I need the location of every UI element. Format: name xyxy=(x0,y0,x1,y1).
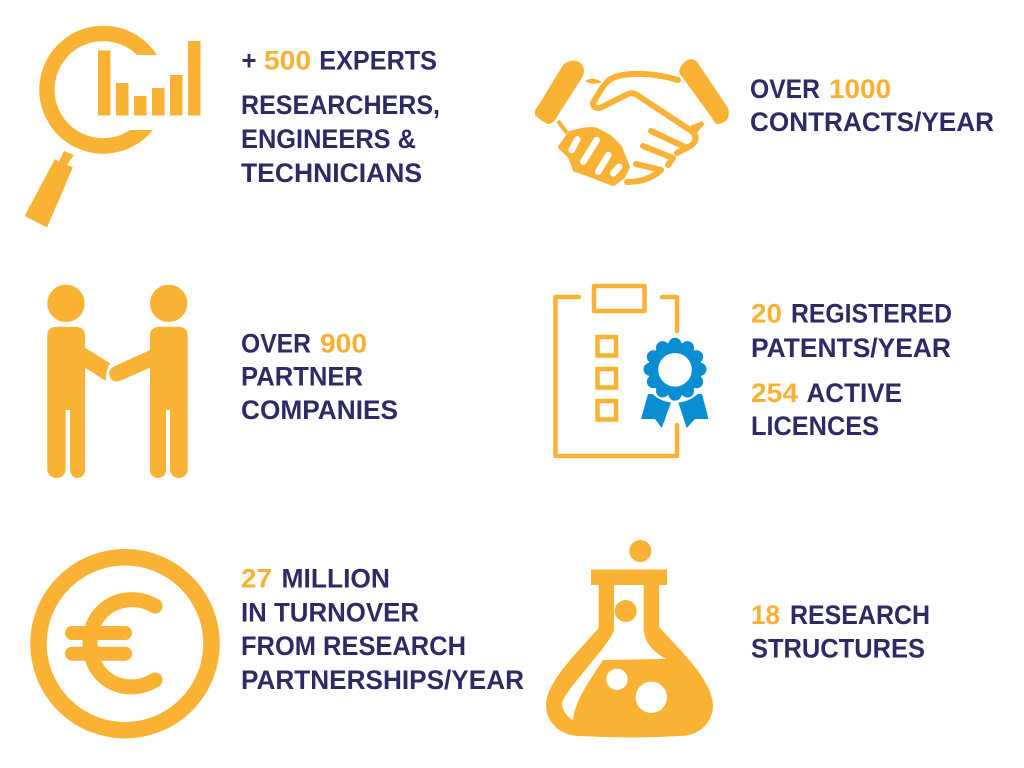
text: 18 research structures: STRUCTURES xyxy=(751,634,925,664)
text: 27 million turnover: PARTNERSHIPS/YEAR xyxy=(241,665,524,695)
text: 500 experts: RESEARCHERS, xyxy=(241,90,440,120)
text: 27 million turnover: MILLION xyxy=(282,564,390,594)
text: 27 million turnover xyxy=(241,564,524,695)
text: 500 experts: TECHNICIANS xyxy=(241,158,422,188)
text: 500 experts: + xyxy=(242,46,256,76)
text: over 1000 contracts: CONTRACTS/YEAR xyxy=(750,107,994,137)
text: 500 experts: 500 xyxy=(264,46,311,76)
text: patents and licences: 20 xyxy=(751,298,782,328)
text: over 1000 contracts: 1000 xyxy=(829,74,891,104)
text: patents and licences: ACTIVE xyxy=(806,378,902,408)
icon: handshake xyxy=(535,59,729,184)
icon: magnifying glass with bar chart xyxy=(25,26,200,228)
text: over 1000 contracts xyxy=(750,74,994,137)
text: over 900 partners: OVER xyxy=(241,328,311,358)
text: patents and licences: LICENCES xyxy=(751,411,879,441)
text: 27 million turnover: IN TURNOVER xyxy=(241,598,419,628)
text: 27 million turnover: FROM RESEARCH xyxy=(241,631,466,661)
text: 500 experts xyxy=(241,46,440,188)
text: patents and licences: 254 xyxy=(751,378,798,408)
text: over 900 partners: PARTNER xyxy=(241,362,363,392)
text: 500 experts: ENGINEERS & xyxy=(241,124,416,154)
text: 27 million turnover: 27 xyxy=(241,564,272,594)
text: 500 experts: EXPERTS xyxy=(319,46,437,76)
text: patents and licences: PATENTS/YEAR xyxy=(751,333,951,363)
text: patents and licences: REGISTERED xyxy=(791,298,952,328)
text: patents and licences xyxy=(751,298,952,441)
text: over 900 partners: COMPANIES xyxy=(241,395,398,425)
text: 18 research structures: 18 xyxy=(751,600,780,630)
text: over 900 partners: 900 xyxy=(320,328,367,358)
icon: laboratory flask xyxy=(546,540,713,738)
icon: clipboard with rosette xyxy=(556,286,708,456)
text: over 900 partners xyxy=(241,328,398,425)
text: 18 research structures: RESEARCH xyxy=(790,600,930,630)
text: 18 research structures xyxy=(751,600,930,664)
icon: euro coin xyxy=(38,557,212,730)
text: over 1000 contracts: OVER xyxy=(750,74,820,104)
icon: two people shaking hands xyxy=(47,285,188,478)
